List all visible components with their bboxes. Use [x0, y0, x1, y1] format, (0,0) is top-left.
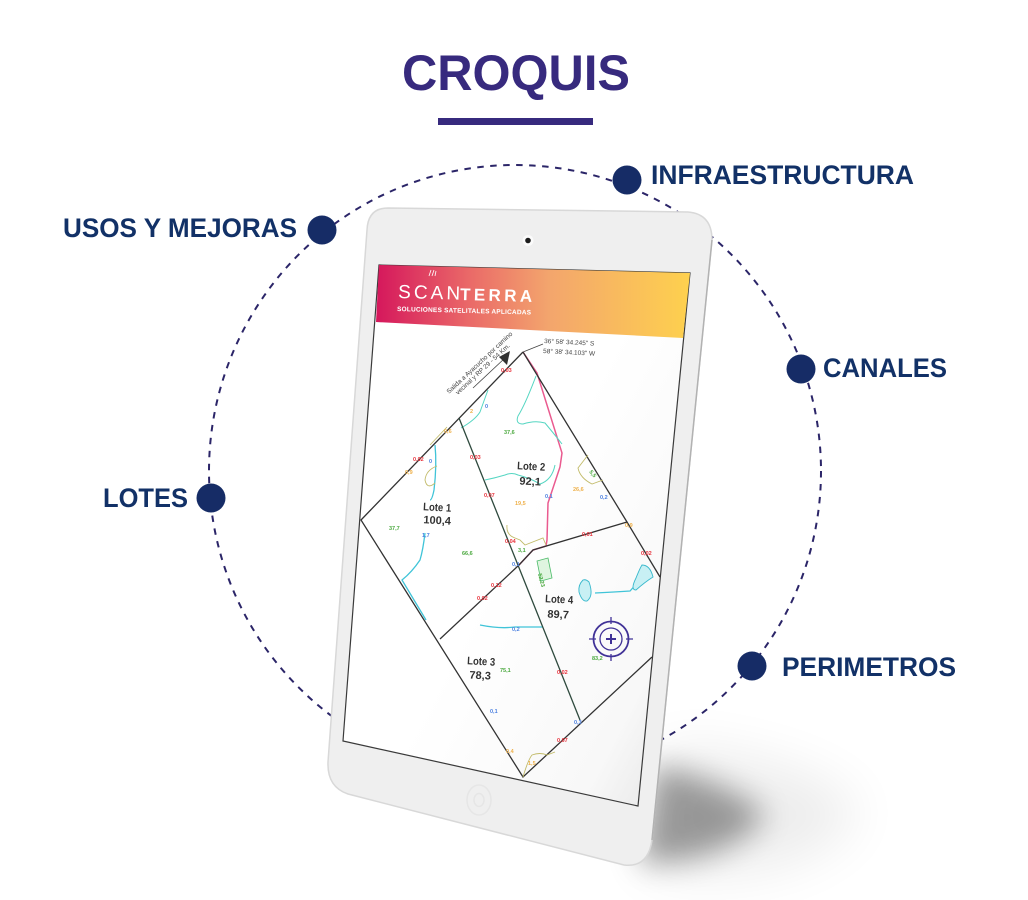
green block: [537, 558, 552, 581]
screen header gradient: [376, 265, 690, 338]
blue values: [422, 404, 608, 726]
red values: 0,01: [582, 532, 593, 538]
lot labels: Lote 3: [467, 655, 495, 669]
tablet: [328, 208, 712, 865]
logo: TERRA: [460, 285, 532, 306]
red values: 0,04: [505, 539, 517, 545]
blue values: 0,2: [512, 627, 520, 633]
logo: [397, 270, 532, 317]
lot labels: 89,7: [547, 608, 569, 622]
ponds: [579, 565, 653, 601]
route arrow: [473, 344, 543, 388]
green values: 37,7: [389, 526, 400, 532]
blue canals: [402, 445, 640, 628]
home button: [467, 785, 491, 815]
item: usos y mejoras: USOS Y MEJORAS: [63, 213, 297, 243]
coordinates: [543, 337, 596, 358]
green values: [389, 430, 603, 674]
title: CROQUIS: [402, 45, 630, 101]
orange values: 19,5: [515, 501, 526, 507]
cyan canals: [461, 376, 562, 484]
orange values: 1,5: [528, 761, 536, 767]
logo: SCAN: [398, 282, 460, 305]
blue values: 0,1: [512, 562, 520, 568]
green values: 83,2: [592, 656, 603, 662]
lot labels: 92,1: [519, 475, 541, 489]
red values: 0,02: [413, 457, 424, 463]
red values: 0,12: [491, 583, 502, 589]
tablet shadow: [640, 745, 860, 875]
green values: 52,23: [536, 573, 545, 588]
red values: 0,07: [557, 738, 568, 744]
lot labels: Lote 2: [517, 460, 545, 474]
parcel boundaries: [361, 352, 660, 777]
blue values: 0,3: [574, 720, 582, 726]
red values: 0,02: [641, 551, 652, 557]
camera: [522, 235, 534, 246]
blue values: 0: [485, 404, 488, 410]
green values: 66,6: [462, 551, 473, 557]
red values: [413, 368, 652, 744]
red values: 0,02: [477, 596, 488, 602]
blue values: 0,1: [545, 494, 553, 500]
orange values: 2: [470, 409, 473, 415]
lot labels: [423, 460, 574, 683]
orange values: 0,9: [405, 470, 413, 476]
blue values: 1,7: [422, 533, 430, 539]
green values: 37,6: [504, 430, 515, 436]
orange values: 26,6: [573, 487, 584, 493]
item: perimetros: PERIMETROS: [782, 652, 956, 682]
red values: 0,02: [557, 670, 568, 676]
coordinates: 58° 38' 34.103" W: [543, 347, 596, 358]
lot labels: Lote 1: [423, 501, 451, 515]
route note: vecinal y RP 29 - 54 Km.: [455, 343, 512, 396]
olive contours: [425, 427, 603, 777]
red values: 0,03: [501, 368, 512, 374]
item: infraestructura: INFRAESTRUCTURA: [651, 160, 914, 190]
green values: 5,5: [587, 469, 597, 479]
pink canal: [519, 352, 562, 565]
tablet body: [328, 208, 712, 865]
screen: [343, 265, 690, 806]
map: [361, 331, 660, 777]
blue values: 0,1: [490, 709, 498, 715]
target marker: [589, 617, 633, 661]
route note: Salida a Ayacucho por camino: [446, 331, 515, 395]
item: lotes: LOTES: [103, 483, 188, 513]
item: canales: CANALES: [823, 353, 947, 383]
lot labels: 100,4: [423, 514, 452, 528]
blue values: 0: [429, 459, 432, 465]
lot labels: Lote 4: [545, 593, 574, 607]
tablet right edge: [652, 240, 712, 840]
orange values: 0,9: [625, 523, 633, 529]
dashed circle: [209, 165, 821, 777]
green values: 3,1: [518, 548, 526, 554]
green values: 75,1: [500, 668, 511, 674]
title underline: [438, 118, 593, 125]
coordinates: 36° 58' 34.245" S: [544, 337, 595, 348]
orange values: [405, 409, 633, 767]
lot labels: 78,3: [469, 669, 491, 683]
logo: SOLUCIONES SATELITALES APLICADAS: [397, 306, 532, 317]
orange values: 0,6: [444, 429, 452, 435]
red values: 0,07: [484, 493, 495, 499]
red values: 0,03: [470, 455, 481, 461]
blue values: 0,2: [600, 495, 608, 501]
orange values: 0,4: [506, 749, 515, 755]
